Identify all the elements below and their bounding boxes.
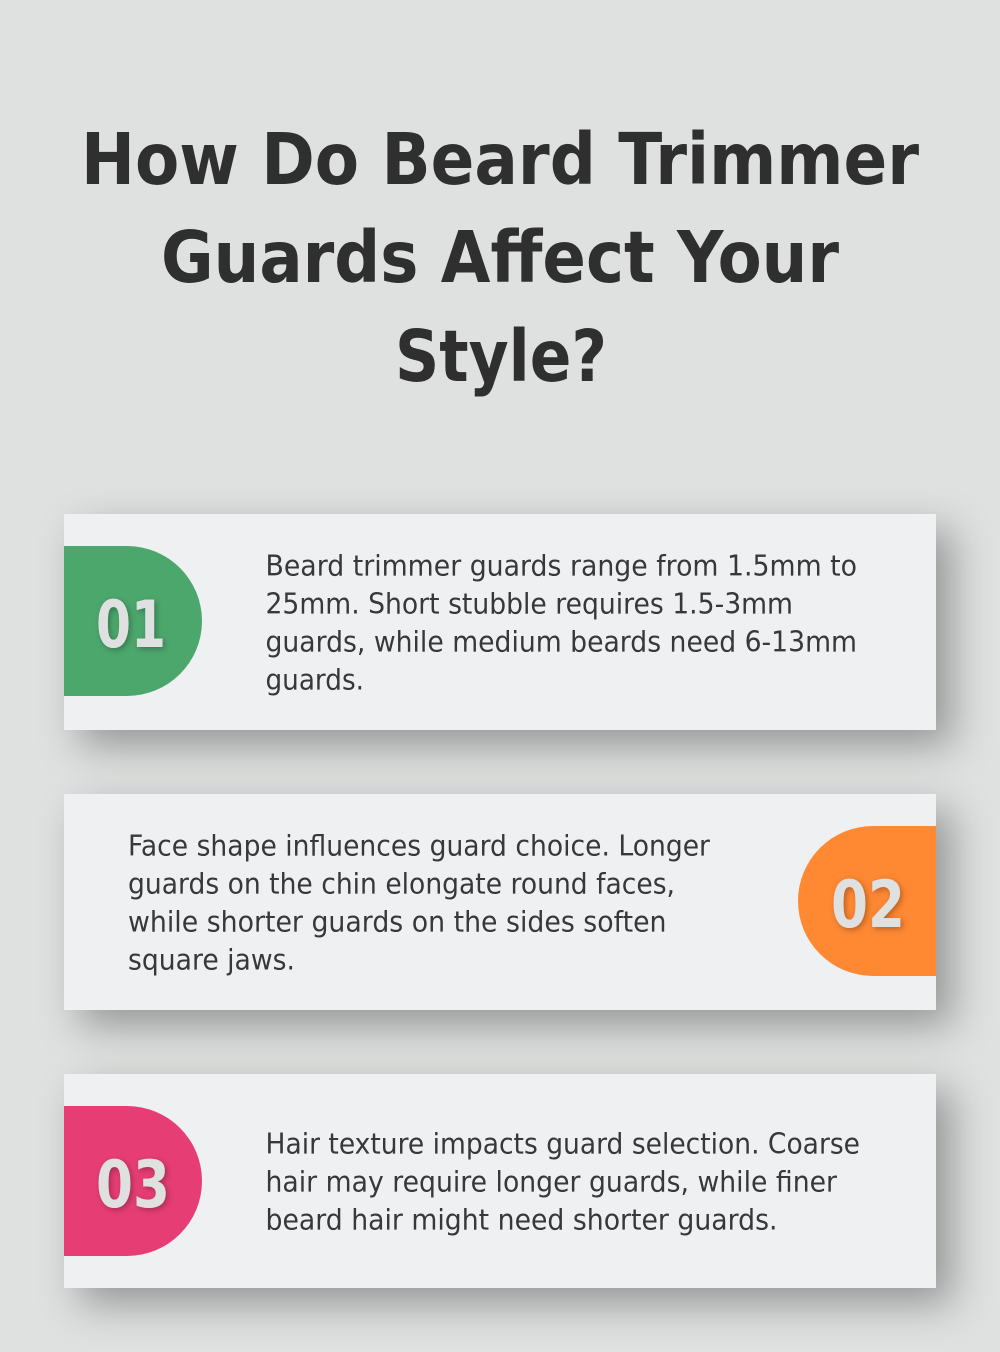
card background 02 — [64, 794, 936, 1010]
number 02: 02 — [831, 868, 905, 943]
text block 02: square jaws. — [128, 944, 295, 976]
title — [81, 118, 919, 398]
card background 03 — [64, 1074, 936, 1288]
badge: 02 — [798, 826, 936, 976]
text block 03: beard hair might need shorter guards. — [266, 1204, 778, 1236]
text block 03: hair may require longer guards, while finer — [266, 1166, 837, 1198]
text block 01: Beard trimmer guards range from 1.5mm to — [266, 550, 857, 582]
badge: 01 — [64, 546, 202, 696]
panel: step 01 — [64, 514, 936, 730]
text block 02 — [128, 830, 710, 976]
text block 01: guards, while medium beards need 6-13mm — [266, 626, 857, 658]
text block 02: while shorter guards on the sides soften — [128, 906, 666, 938]
title: Style? — [395, 315, 607, 398]
number 01: 01 — [96, 588, 166, 663]
title: How Do Beard Trimmer — [81, 118, 919, 201]
text block 03 — [266, 1128, 860, 1236]
card background 01 — [64, 514, 936, 730]
text block 02: guards on the chin elongate round faces, — [128, 868, 675, 900]
badge: 03 — [64, 1106, 202, 1256]
text block 03: Hair texture impacts guard selection. Coarse — [266, 1128, 860, 1160]
title: Guards Affect Your — [161, 216, 839, 299]
text block 01 — [266, 550, 857, 696]
panel: step 03 — [64, 1074, 936, 1288]
number 03: 03 — [96, 1148, 170, 1223]
panel: step 02 — [64, 794, 936, 1010]
text block 02: Face shape influences guard choice. Longer — [128, 830, 710, 862]
text block 01: guards. — [266, 664, 364, 696]
text block 01: 25mm. Short stubble requires 1.5-3mm — [266, 588, 793, 620]
